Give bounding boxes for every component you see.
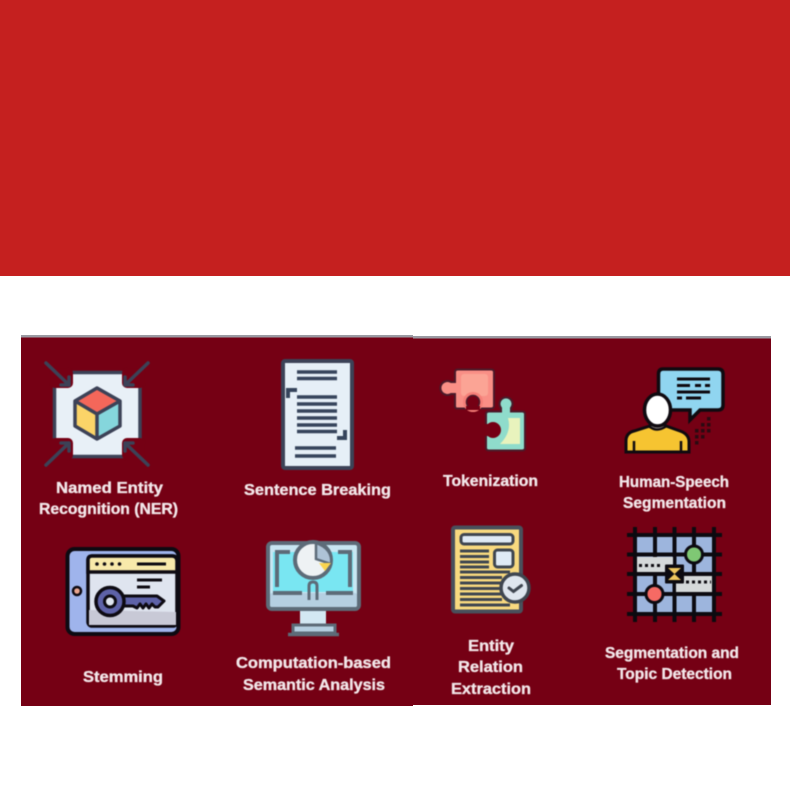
label: Tokenization: Tokenization (443, 473, 538, 490)
label: Computation-based Semantic Analysis: Semantic Analysis (243, 677, 385, 694)
icon: puzzle pieces (440, 370, 525, 450)
icon: cube with corner arrows (46, 363, 148, 465)
label: Entity Relation Extraction: Relation (458, 659, 523, 676)
label: Human-Speech Segmentation (619, 474, 729, 512)
item: Stemming (68, 549, 178, 686)
item: Entity Relation Extraction (451, 528, 531, 698)
item: Computation-based Semantic Analysis (236, 542, 391, 694)
label: Segmentation and Topic Detection (605, 645, 739, 683)
label: Human-Speech Segmentation: Human-Speech (619, 474, 729, 491)
label: Entity Relation Extraction: Extraction (451, 681, 531, 698)
panel: left maroon (21, 336, 413, 706)
icon: document with check badge (453, 528, 529, 612)
item: Sentence Breaking (244, 361, 391, 499)
label: Segmentation and Topic Detection: Segmentation and (605, 645, 739, 662)
icon: document with bracketed lines (283, 361, 352, 468)
label: Stemming: Stemming (83, 669, 163, 686)
item: Named Entity Recognition (39, 363, 178, 518)
icon: grid map with markers (627, 527, 722, 622)
label: Computation-based Semantic Analysis: Computation-based (236, 655, 391, 672)
label: Sentence Breaking: Sentence Breaking (244, 482, 391, 499)
label: Computation-based Semantic Analysis (236, 655, 391, 694)
label: Named Entity Recognition (NER): Named Entity (56, 480, 163, 497)
icon: person with speech bubble (626, 369, 723, 452)
label: Entity Relation Extraction: Entity (468, 638, 514, 655)
label: Named Entity Recognition (NER): Recognition (NER) (39, 501, 178, 518)
label: Human-Speech Segmentation: Segmentation (623, 495, 726, 512)
label: Entity Relation Extraction (451, 638, 531, 698)
item: Human-Speech Segmentation (619, 369, 729, 512)
icon: monitor with pie chart magnifier (268, 542, 359, 634)
label: Segmentation and Topic Detection: Topic Detection (617, 666, 732, 683)
label: Named Entity Recognition (NER) (39, 480, 178, 518)
item: Segmentation and Topic Detection (605, 527, 739, 683)
panel: right maroon (413, 337, 771, 705)
item: Tokenization (440, 370, 538, 490)
red header band (0, 0, 790, 276)
icon: tablet with key (68, 549, 178, 634)
